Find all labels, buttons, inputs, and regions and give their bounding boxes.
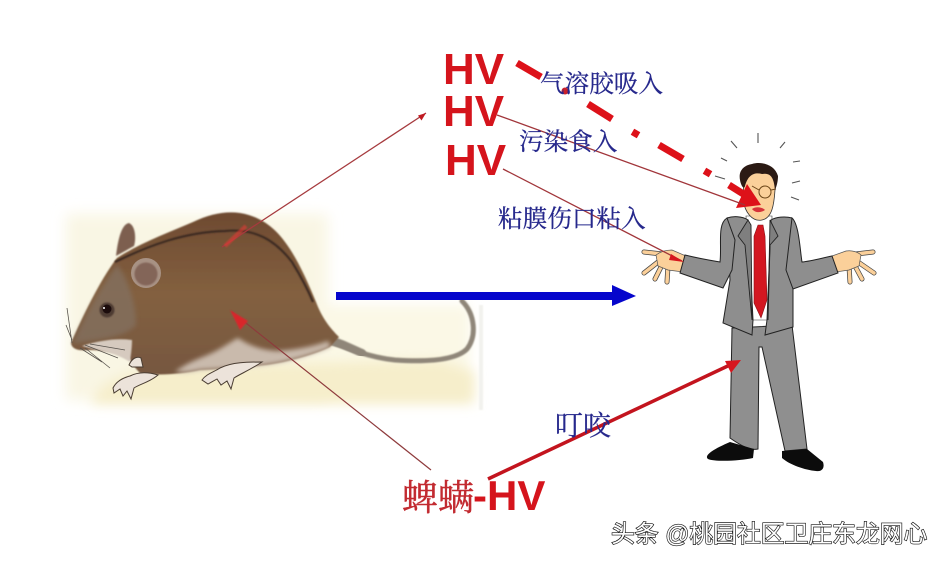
label: mites HV: -HV <box>473 472 545 519</box>
rat head shading <box>73 265 136 343</box>
rat background <box>66 214 483 410</box>
rat back stripe <box>115 231 313 302</box>
arrow: mucosa to hand <box>503 169 684 262</box>
label: HV food: HV <box>443 87 505 136</box>
rat cheek <box>82 339 132 362</box>
rat illustration <box>66 212 483 410</box>
lapels <box>738 220 778 320</box>
label: HV mucosa: HV <box>445 136 507 185</box>
label: HV aerosol: HV <box>443 45 505 94</box>
right hand <box>832 251 874 282</box>
right sleeve <box>786 218 838 289</box>
mouth <box>752 207 765 212</box>
rat front paws <box>113 357 262 399</box>
rat body <box>71 212 339 374</box>
hair <box>740 163 778 190</box>
head <box>743 166 775 220</box>
rat eye <box>100 302 114 318</box>
arrow: mites bite <box>488 360 741 479</box>
human figure <box>644 133 874 471</box>
blue arrow: rat to human <box>336 285 636 306</box>
shirt <box>746 216 772 320</box>
watermark: 头条 @桃园社区卫庄东龙网心 <box>611 521 927 548</box>
label: contaminated food: 污染食入 <box>519 128 618 156</box>
left sleeve <box>680 218 735 288</box>
rat back ear <box>116 223 135 256</box>
arrow: mites to rat <box>230 310 431 470</box>
glasses <box>752 186 776 198</box>
trousers <box>730 325 807 451</box>
rays around head <box>715 133 800 200</box>
dashed aerosol arrow <box>517 63 761 208</box>
rat belly <box>175 338 331 372</box>
arrow: rat to HV <box>222 113 426 247</box>
tie <box>754 225 767 318</box>
rat whiskers <box>66 308 125 368</box>
label: aerosol inhalation: 气溶胶吸入 <box>540 70 663 98</box>
label: bite: 叮咬 <box>555 410 612 442</box>
label: mucosa wound: 粘膜伤口粘入 <box>498 205 646 233</box>
label: mites HV: 蜱螨 <box>402 478 474 518</box>
label: mites HV <box>402 472 545 519</box>
jacket <box>723 217 797 335</box>
rat ear <box>131 258 161 288</box>
shoes <box>707 442 824 471</box>
arrow: food to mouth <box>497 115 745 205</box>
rat tail <box>328 301 473 361</box>
left hand <box>644 250 686 282</box>
